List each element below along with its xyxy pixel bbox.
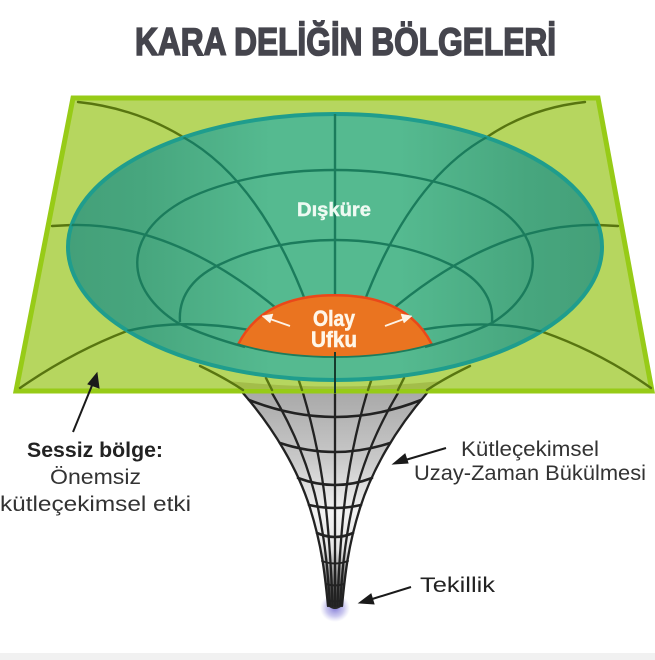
arrow: singularity bbox=[359, 587, 411, 604]
label: outer sphere: Dışküre bbox=[297, 200, 371, 221]
text: quiet zone: kütleçekimsel etki bbox=[0, 493, 191, 516]
arrow: quiet zone bbox=[73, 373, 99, 432]
text: quiet zone: Önemsiz bbox=[50, 466, 141, 489]
shadow under the disc bbox=[228, 381, 442, 389]
text: curvature: Kütleçekimsel bbox=[461, 438, 599, 461]
bottom strip bbox=[0, 653, 655, 660]
center axis below horizon bbox=[334, 352, 336, 393]
plane grid lines bbox=[20, 102, 651, 390]
singularity glow bbox=[320, 594, 350, 622]
funnel rings bbox=[249, 400, 421, 417]
panel: quiet zone plane bbox=[16, 98, 652, 391]
funnel: gravitational space-time curvature bbox=[243, 393, 427, 622]
text: singularity: Tekillik bbox=[420, 574, 496, 597]
label: event horizon: Ufku bbox=[311, 327, 357, 352]
funnel radial lines bbox=[243, 393, 328, 606]
text: curvature bbox=[414, 438, 646, 485]
panel: event horizon bbox=[237, 294, 433, 357]
text: curvature: Uzay-Zaman Bükülmesi bbox=[414, 462, 646, 485]
text: quiet zone bbox=[0, 439, 191, 516]
funnel body bbox=[243, 393, 427, 609]
arrow: expands left bbox=[262, 314, 290, 326]
title: KARA DELİĞİN BÖLGELERİ bbox=[135, 20, 556, 64]
disc grid lines bbox=[70, 100, 600, 347]
text: quiet zone: Sessiz bölge: bbox=[27, 439, 163, 462]
panel: outer sphere disc bbox=[68, 100, 602, 380]
arrow: expands right bbox=[385, 314, 412, 326]
label: event horizon bbox=[311, 306, 357, 352]
label: event horizon: Olay bbox=[313, 306, 356, 331]
arrow: curvature bbox=[393, 448, 446, 464]
